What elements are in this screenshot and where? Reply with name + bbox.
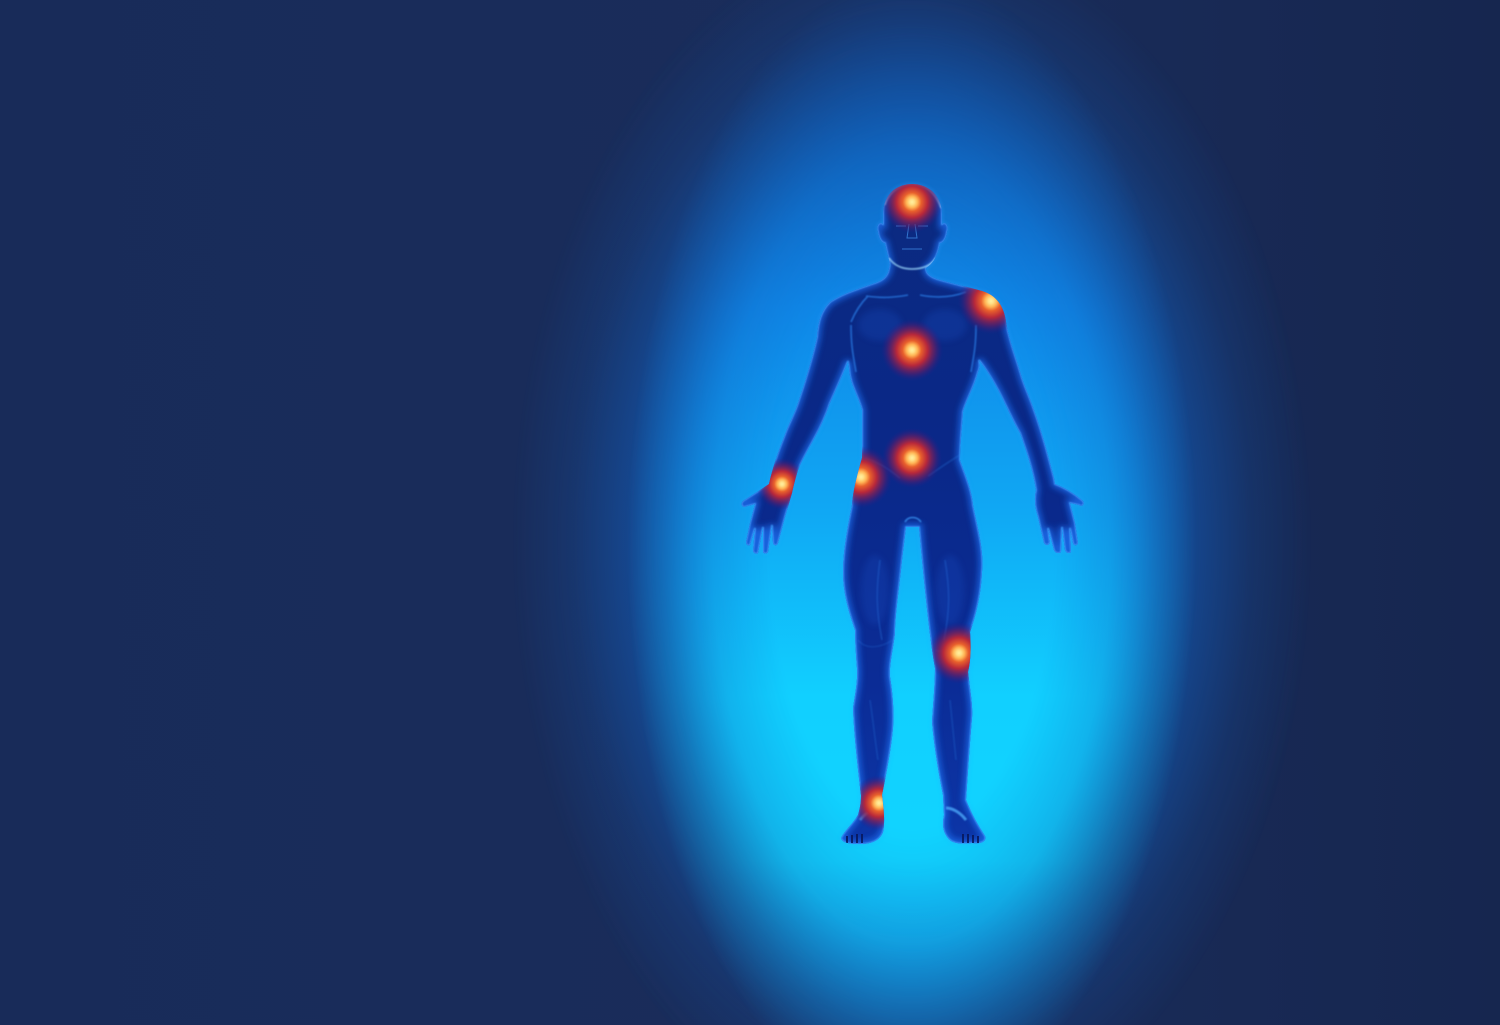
glow: outer blue halo xyxy=(540,0,1285,1025)
pain point: shoulder xyxy=(960,286,1007,332)
muscle and rim highlights xyxy=(851,185,976,820)
face details xyxy=(896,224,928,249)
pain point: head xyxy=(884,184,942,232)
chest and thigh sheen xyxy=(858,309,967,625)
pain point: abdomen xyxy=(884,430,940,486)
pain point: chest xyxy=(883,321,941,379)
glow: inner blue-to-cyan aura xyxy=(637,10,1187,1025)
pain point: wrist xyxy=(758,460,800,508)
figure: human body xyxy=(742,171,1084,844)
pain point: hip xyxy=(852,447,890,506)
pain point: ankle xyxy=(856,776,886,830)
pain point: knee xyxy=(931,624,972,682)
illustration: human figure with glowing pain points xyxy=(530,0,1500,1025)
toes xyxy=(847,834,978,843)
